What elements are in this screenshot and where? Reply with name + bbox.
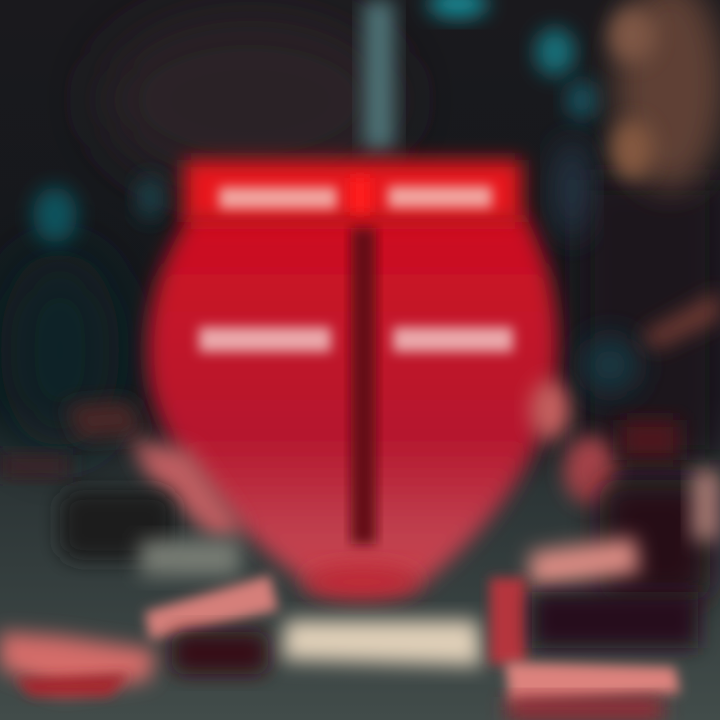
scattered ribbons left [0, 400, 278, 696]
glow: teal lights [33, 0, 598, 243]
shield header band [184, 160, 522, 222]
header label right [388, 186, 492, 208]
header center highlight [350, 178, 370, 212]
vertical dark bar [351, 228, 376, 544]
glowing plate below shield [282, 620, 482, 666]
shield base [304, 564, 420, 600]
shield [147, 160, 558, 600]
header label left [219, 187, 337, 209]
body label right [393, 327, 513, 352]
body label left [199, 327, 331, 352]
scattered ribbons right [490, 380, 720, 720]
person at right [556, 0, 720, 460]
shield body [147, 215, 558, 585]
